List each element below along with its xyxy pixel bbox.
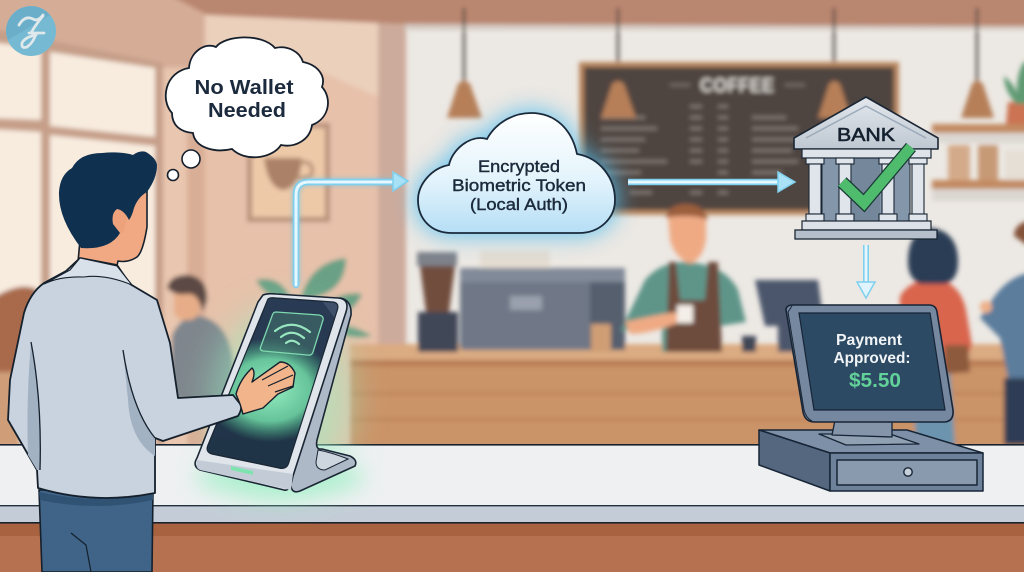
wall: peach centre wall xyxy=(205,14,381,450)
bubble heading text: No Wallet xyxy=(194,76,294,99)
wooden counter, back xyxy=(350,344,1024,448)
collar xyxy=(44,258,132,285)
screen xyxy=(208,298,338,468)
plinth xyxy=(802,221,931,230)
wall: left window wall xyxy=(0,0,206,450)
tablet payment terminal xyxy=(195,290,356,492)
rear till xyxy=(755,280,824,352)
lamp shades xyxy=(447,81,994,118)
thought dots xyxy=(168,150,200,180)
customer far right xyxy=(980,220,1024,445)
cloud: encrypted biometric token xyxy=(418,113,615,233)
left customer blurred xyxy=(0,287,38,372)
monitor xyxy=(786,305,953,422)
entablature xyxy=(802,149,931,158)
shirt xyxy=(8,258,241,498)
hand on scanner xyxy=(236,362,295,414)
green check mark xyxy=(842,147,911,203)
status light xyxy=(231,466,253,475)
wall picture: coffee cup xyxy=(247,123,330,222)
window xyxy=(0,28,163,445)
trousers xyxy=(39,490,153,572)
wifi icon xyxy=(275,325,310,344)
pendant lamp cords xyxy=(464,8,977,84)
ceiling xyxy=(160,0,1024,26)
payment register xyxy=(759,305,983,491)
menu rows xyxy=(601,84,805,194)
glow: cloud xyxy=(418,113,615,233)
cloud text: Encrypted xyxy=(478,158,560,176)
neck and face xyxy=(78,190,147,270)
logo badge xyxy=(6,6,56,56)
wall: column xyxy=(378,14,406,450)
barista xyxy=(620,204,756,352)
glow: around tablet xyxy=(195,308,365,498)
amount: $5.50 xyxy=(849,370,901,392)
payment register: Approved: xyxy=(834,350,910,367)
seated customer xyxy=(167,275,234,400)
thought bubble: No Wallet Needed xyxy=(166,37,328,180)
frame xyxy=(195,294,347,490)
wall: pale back wall top band xyxy=(405,14,1024,30)
arrow: cloud to bank xyxy=(628,172,795,192)
back wall xyxy=(822,156,910,224)
cloud: encrypted biometric token: (Local Auth) xyxy=(470,196,568,214)
hair xyxy=(59,151,157,248)
menu heading: COFFEE xyxy=(700,75,774,97)
wall highlight xyxy=(205,14,381,98)
thought bubble: No Wallet Needed: Needed xyxy=(208,99,286,122)
shirt shading xyxy=(27,342,155,470)
customer in red xyxy=(898,228,972,445)
plant xyxy=(256,258,372,338)
cash drawer base xyxy=(759,430,983,491)
arrow: bank to register xyxy=(857,245,875,298)
menu board xyxy=(579,62,899,215)
drawer lock xyxy=(904,468,912,476)
bank icon with check mark xyxy=(794,97,938,239)
pediment xyxy=(794,97,938,149)
person from behind xyxy=(8,151,241,572)
monitor screen xyxy=(799,313,945,410)
columns xyxy=(806,158,927,221)
contactless panel xyxy=(260,312,323,355)
ear xyxy=(112,209,127,234)
bank label: BANK xyxy=(837,124,896,145)
arrow: terminal to cloud xyxy=(296,172,408,285)
shelves with jars and plant xyxy=(932,62,1024,201)
stand xyxy=(286,298,356,492)
espresso machine xyxy=(417,250,625,352)
monitor stand xyxy=(819,420,919,445)
payment text: Payment xyxy=(836,332,903,349)
cloud: encrypted biometric token: Biometric Token xyxy=(452,177,586,195)
counter xyxy=(0,444,1024,572)
